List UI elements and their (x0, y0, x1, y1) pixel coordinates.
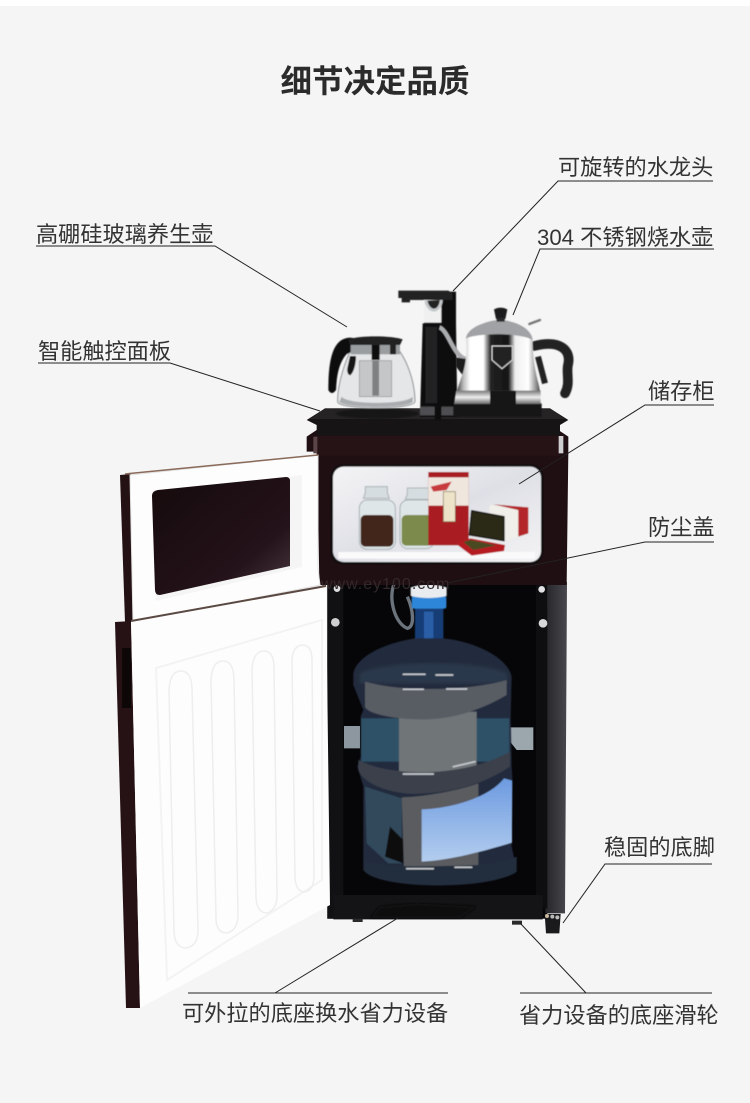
teapot lid (348, 336, 403, 345)
door side edge (115, 621, 140, 1008)
middle gray label (399, 712, 477, 773)
bottom ring (363, 857, 517, 885)
callout: base caster (519, 923, 719, 1028)
door face (130, 455, 320, 622)
kettle plinth (453, 403, 542, 417)
callout: rotating faucet (453, 155, 713, 291)
door embossed ribs (169, 645, 314, 948)
upper cabinet door (120, 455, 320, 622)
door recess (152, 475, 302, 601)
top white strip (0, 0, 750, 6)
water hose (392, 584, 412, 628)
callout: touch panel: 智能触控面板 (38, 339, 171, 364)
trim highlights (313, 437, 317, 453)
teapot glass (338, 352, 415, 408)
callout: storage cabinet: 储存柜 (648, 379, 715, 404)
lower left body (365, 787, 402, 863)
callout: storage cabinet (519, 379, 715, 484)
faucet spout (398, 291, 453, 302)
door dark window (152, 477, 290, 595)
trim band (317, 436, 560, 456)
title: 细节决定品质 (280, 63, 470, 99)
light-blue reflection (422, 778, 512, 862)
callout: rotating faucet: 可旋转的水龙头 (558, 155, 713, 180)
lower cabinet door (115, 586, 330, 1008)
lower ring (358, 752, 510, 794)
teapot glass sheen (339, 397, 413, 407)
callout: stainless kettle (513, 225, 714, 315)
casters (353, 919, 522, 925)
bottle silhouette (353, 638, 517, 885)
callout: glass teapot (36, 222, 347, 327)
kettle handle (534, 344, 569, 393)
bottle neck (415, 607, 443, 639)
callout: stainless kettle: 304 不锈钢烧水壶 (537, 225, 713, 250)
door top edge (131, 586, 326, 621)
jar: red tea (359, 487, 395, 549)
kettle shoulder (466, 320, 533, 340)
cabinet interior (327, 582, 547, 919)
tea box (428, 472, 469, 545)
water dispenser lower cabinet with water bottle (327, 582, 567, 933)
callout: stable foot: 稳固的底脚 (604, 835, 715, 860)
gray lower label (402, 783, 478, 867)
counter top (307, 408, 568, 436)
cabinet right side panel (545, 582, 567, 913)
steel kettle (439, 308, 569, 417)
highlights (403, 674, 475, 869)
callout: dust cover: 防尘盖 (648, 515, 715, 540)
side brackets (344, 726, 533, 750)
callout: touch panel (38, 339, 320, 411)
faucet neck (424, 292, 456, 325)
kettle spout (439, 327, 467, 359)
teapot base (336, 409, 419, 418)
door embossed frame (156, 620, 322, 980)
callout: dust cover (448, 515, 715, 583)
door edge (120, 474, 135, 622)
callout: stable foot (563, 835, 715, 923)
door handle slot (122, 648, 131, 708)
storage window (331, 465, 543, 564)
kettle band (454, 391, 541, 404)
tea tin (458, 504, 528, 556)
faucet (398, 291, 457, 420)
stabilising foot (545, 914, 561, 933)
teapot infuser (359, 361, 392, 397)
kettle badge (492, 346, 512, 369)
callout: pull-out base: 可外拉的底座换水省力设备 (182, 1001, 448, 1026)
door face (131, 586, 330, 1008)
door top edge highlight (125, 455, 318, 474)
kettle lever (529, 320, 540, 324)
faucet chrome ring (426, 300, 441, 310)
bottle cap (412, 596, 446, 609)
upper ring (365, 680, 507, 719)
glass teapot (328, 336, 419, 418)
callout: glass teapot: 高硼硅玻璃养生壶 (36, 222, 214, 247)
teapot handle (328, 338, 356, 393)
screws (331, 585, 547, 628)
kettle body (457, 320, 540, 392)
cabinet body (307, 430, 568, 585)
cabinet left frame (327, 582, 343, 919)
jar: green tea (400, 488, 434, 549)
middle bottle body blue sides (361, 718, 509, 762)
faucet column (420, 323, 457, 417)
shoulder shading (360, 663, 507, 683)
callout: pull-out base (182, 918, 448, 1026)
upper cabinet and counter (307, 291, 569, 585)
callout: base caster: 省力设备的底座滑轮 (519, 1003, 719, 1028)
kettle lid knob (494, 308, 507, 319)
watermark text: www.ey100.com (320, 576, 450, 593)
base pull-out tray (333, 895, 543, 919)
water bottle (353, 584, 517, 885)
